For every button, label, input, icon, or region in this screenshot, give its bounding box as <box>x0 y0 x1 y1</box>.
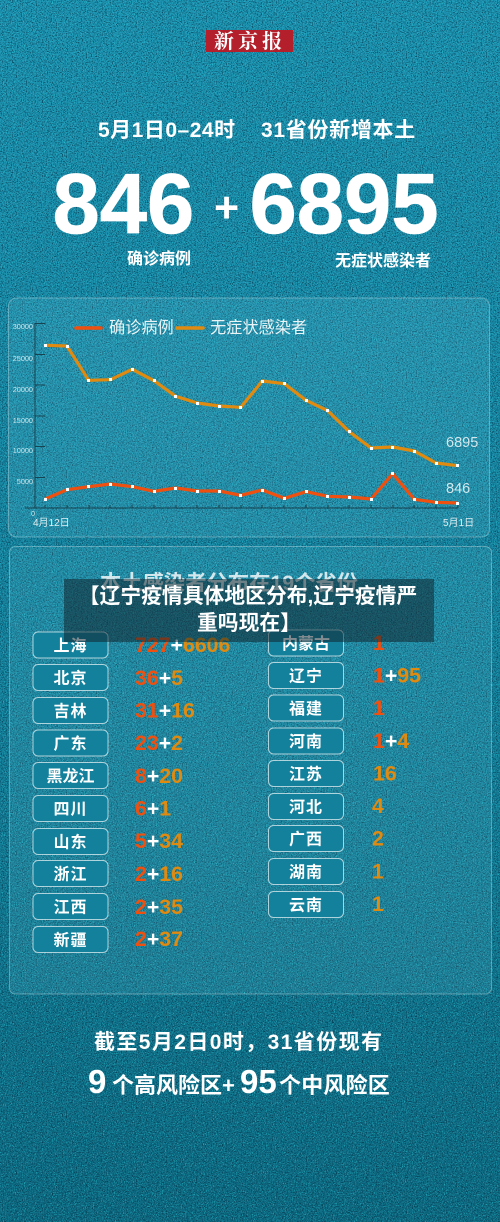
y axis labels <box>13 322 35 518</box>
row: 福建: 1 <box>373 696 385 720</box>
footer line: risk areas: 9 <box>88 1063 106 1100</box>
row: 河南 <box>268 728 409 754</box>
row: 黑龙江 <box>33 762 183 788</box>
y axis labels: 25000 <box>13 354 33 363</box>
row: 湖南: 湖南 <box>289 864 323 882</box>
row: 福建 <box>268 695 385 721</box>
stat: confirmed cases: 846 <box>52 157 194 252</box>
row: 吉林: 吉林 <box>53 702 88 720</box>
panel: provincial distribution <box>10 546 492 994</box>
panel heading: 本土感染者分布在19个省份 <box>100 570 359 595</box>
row: 四川: 四川 <box>53 802 88 818</box>
chart axes <box>25 324 458 508</box>
row: 吉林: 31+16 <box>135 698 195 722</box>
legend: 无症状感染者 <box>210 319 307 337</box>
line: asymptomatic <box>44 344 459 467</box>
row: 河北 <box>268 794 384 820</box>
row: 山东 <box>33 828 183 854</box>
row: 新疆: 新疆 <box>53 930 88 950</box>
footer line: risk areas: 个高风险区+ <box>112 1073 235 1098</box>
logo: 新京报: 新京报 <box>214 30 286 53</box>
row: 云南 <box>268 892 384 918</box>
right column: provinces <box>268 630 421 918</box>
line: confirmed <box>44 472 459 505</box>
legend: 确诊病例 <box>109 319 174 337</box>
row: 上海 <box>33 632 231 658</box>
row: 山东: 山东 <box>53 832 88 852</box>
row: 广东: 广东 <box>53 734 88 753</box>
row: 北京: 36+5 <box>135 666 183 690</box>
left column: provinces <box>33 632 231 952</box>
row: 江西: 2+35 <box>135 895 183 919</box>
row: 黑龙江: 8+20 <box>135 764 183 788</box>
row: 广西: 广西 <box>289 830 323 848</box>
x label: end date: 5月1日 <box>443 517 474 529</box>
row: 四川 <box>33 796 171 822</box>
row: 浙江: 2+16 <box>135 862 183 886</box>
y axis labels: 15000 <box>13 416 33 425</box>
stat: asymptomatic cases: 6895 <box>250 157 439 252</box>
plus sign: + <box>214 184 239 232</box>
overlay banner: article title: 重吗现在】 <box>197 612 301 635</box>
stat: asymptomatic cases: 无症状感染者 <box>335 251 431 270</box>
row: 河北: 4 <box>372 794 384 818</box>
footer line: as of date: 截至5月2日0时，31省份现有 <box>94 1031 383 1054</box>
row: 江苏: 16 <box>373 762 397 786</box>
footer line: risk areas <box>88 1063 390 1100</box>
y axis labels: 30000 <box>13 322 33 331</box>
row: 新疆: 2+37 <box>135 927 183 951</box>
stat: confirmed cases: 确诊病例 <box>127 249 191 268</box>
y axis labels: 20000 <box>13 385 33 394</box>
row: 山东: 5+34 <box>135 829 183 853</box>
y axis labels: 0 <box>31 509 35 518</box>
row: 江苏: 江苏 <box>289 764 323 784</box>
row: 浙江 <box>33 860 183 886</box>
row: 新疆 <box>33 926 183 952</box>
overlay banner: article title: 【辽宁疫情具体地区分布,辽宁疫情严 <box>79 584 417 608</box>
row: 广西 <box>268 826 384 852</box>
row: 河北: 河北 <box>289 798 323 816</box>
row: 四川: 6+1 <box>135 796 171 820</box>
row: 广西: 2 <box>372 826 384 850</box>
row: 北京: 北京 <box>53 668 88 688</box>
row: 河南: 河南 <box>289 733 323 751</box>
y axis labels: 5000 <box>17 477 33 486</box>
row: 河南: 1+4 <box>373 729 409 753</box>
row: 云南: 1 <box>372 892 384 916</box>
row: 江西: 江西 <box>53 898 88 916</box>
panel: trend chart <box>8 298 490 537</box>
row: 内蒙古: 内蒙古 <box>282 634 330 653</box>
row: 湖南 <box>268 858 384 884</box>
footer line: risk areas: 个中风险区 <box>279 1073 390 1098</box>
row: 辽宁: 辽宁 <box>289 666 323 686</box>
row: 辽宁 <box>268 662 421 688</box>
row: 内蒙古 <box>268 630 385 656</box>
row: 内蒙古: 1 <box>373 631 385 655</box>
row: 吉林 <box>33 698 195 724</box>
row: 北京 <box>33 664 183 690</box>
row: 云南: 云南 <box>289 896 323 914</box>
title: new local cases: 31省份新增本土 <box>261 118 416 142</box>
row: 黑龙江: 黑龙江 <box>46 768 95 786</box>
row: 湖南: 1 <box>372 860 384 884</box>
row: 浙江: 浙江 <box>53 866 88 884</box>
row: 广东: 23+2 <box>135 731 183 755</box>
row: 广东 <box>33 730 183 756</box>
footer line: risk areas: 95 <box>240 1063 277 1100</box>
row: 江西 <box>33 894 183 920</box>
overlay banner: article title <box>64 579 434 642</box>
row: 上海: 727+6606 <box>135 633 231 657</box>
end value: 6895: 6895 <box>446 435 478 451</box>
title: date and scope: 5月1日0–24时 <box>98 119 236 142</box>
x label: start date: 4月12日 <box>33 517 70 529</box>
end value: 846: 846 <box>446 481 470 497</box>
row: 福建: 福建 <box>289 700 323 718</box>
row: 江苏 <box>268 760 397 786</box>
row: 辽宁: 1+95 <box>373 664 421 688</box>
y axis labels: 10000 <box>13 446 33 455</box>
legend <box>76 319 307 337</box>
row: 上海: 上海 <box>53 637 88 655</box>
